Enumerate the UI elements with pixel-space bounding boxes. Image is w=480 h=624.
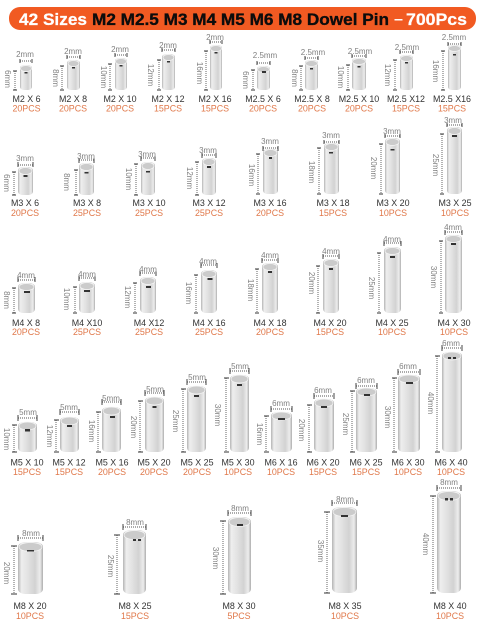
- item: M2 X 8: M2 X 8: [59, 94, 87, 104]
- item: M4 X 10: [62, 270, 102, 337]
- item: M4 X 18: M4 X 18: [253, 318, 287, 328]
- item: M5 X 10: 10mm: [2, 428, 11, 450]
- item: M8 X 40: [421, 478, 467, 621]
- item: M3 X 6: 6mm: [2, 174, 11, 192]
- item: M4 X 16: [184, 257, 226, 337]
- item: M3 X 25: [431, 116, 472, 218]
- item: M3 X 20: 10PCS: [379, 208, 407, 218]
- item: M3 X 8: 25PCS: [73, 208, 101, 218]
- item: M2 X 16: [195, 33, 232, 114]
- item: M3 X 16: 20PCS: [256, 208, 284, 218]
- item: M2 X 8: [51, 47, 87, 114]
- item: M3 X 18: 15PCS: [319, 208, 347, 218]
- item: M5 X 20: [129, 385, 171, 477]
- item: M3 X 16: M3 X 16: [253, 198, 287, 208]
- item: M4 X 25: 4mm: [383, 235, 401, 244]
- item: M3 X 10: 3mm: [138, 150, 156, 159]
- item: M3 X 12: 3mm: [199, 146, 217, 155]
- item: M4 X 8: [2, 271, 40, 337]
- item: M2.5 X 8: 2.5mm: [301, 48, 326, 57]
- item: M5 X 10: [2, 408, 44, 477]
- item: M4 X 12: 12mm: [123, 286, 132, 308]
- item: M2 X 16: 15PCS: [201, 104, 229, 114]
- item: M3 X 10: 25PCS: [135, 208, 163, 218]
- item: M8 X 20: 20mm: [2, 562, 11, 584]
- item: M2.5 X 8: 20PCS: [298, 104, 326, 114]
- item: M4 X 18: [246, 251, 287, 337]
- item: M8 X 35: M8 X 35: [328, 601, 362, 611]
- item: M5 X 25: 20PCS: [183, 467, 211, 477]
- item: M8 X 35: 8mm: [336, 495, 354, 504]
- item: M4 X 30: 30mm: [429, 266, 438, 288]
- item: M8 X 20: 8mm: [22, 529, 40, 538]
- item: M2 X 16: 16mm: [195, 62, 204, 84]
- item: M6 X 25: 15PCS: [352, 467, 380, 477]
- item: M4 X 16: 25PCS: [195, 327, 223, 337]
- item: M2.5 X 6: [241, 51, 281, 114]
- item: M8 X 35: [316, 495, 362, 621]
- item: M6 X 25: 25mm: [341, 413, 350, 435]
- item: M5 X 30: [213, 362, 255, 477]
- item: M8 X 20: 10PCS: [16, 611, 44, 621]
- item: M6 X 25: 6mm: [357, 376, 375, 385]
- item: M8 X 30: 8mm: [231, 504, 249, 513]
- item: M8 X 30: M8 X 30: [222, 601, 256, 611]
- item: M4 X 30: [429, 223, 471, 337]
- item: M5 X 25: M5 X 25: [180, 458, 214, 468]
- item: M4 X 10: 4mm: [78, 270, 96, 279]
- item: M2.5 X 10: 20PCS: [345, 104, 373, 114]
- item: M5 X 30: 10PCS: [224, 467, 252, 477]
- item: M4 X 30: M4 X 30: [437, 318, 471, 328]
- item: M2.5 X 16: 16mm: [431, 60, 440, 82]
- item: M2.5 X 16: M2.5 X16: [433, 94, 471, 104]
- item: M4 X 20: M4 X 20: [313, 318, 347, 328]
- item: M3 X 12: [185, 146, 226, 218]
- title banner: M2 M2.5 M3 M4 M5 M6 M8 Dowel Pin: [92, 10, 389, 29]
- item: M5 X 16: [87, 394, 129, 477]
- item: M4 X 16: 16mm: [184, 282, 193, 304]
- item: M4 X 12: 25PCS: [135, 327, 163, 337]
- item: M2.5 X 12: 2.5mm: [395, 43, 420, 52]
- item: M2 X 10: 2mm: [111, 45, 129, 54]
- item: M3 X 20: 20mm: [369, 157, 378, 179]
- item: M3 X 8: M3 X 8: [73, 198, 101, 208]
- item: M3 X 18: [307, 131, 350, 218]
- item: M8 X 35: 35mm: [316, 540, 325, 562]
- item: M8 X 35: 10PCS: [331, 611, 359, 621]
- item: M2 X 10: [99, 45, 137, 114]
- item: M2.5 X 6: 2.5mm: [253, 51, 278, 60]
- item: M3 X 25: 25mm: [431, 154, 440, 176]
- title banner: [9, 7, 476, 30]
- item: M3 X 12: M3 X 12: [192, 198, 226, 208]
- item: M5 X 30: 5mm: [231, 362, 249, 371]
- item: M3 X 6: 20PCS: [11, 208, 39, 218]
- item: M6 X 30: 6mm: [399, 362, 417, 371]
- item: M8 X 30: [211, 504, 256, 621]
- item: M4 X 20: 20mm: [307, 272, 316, 294]
- item: M3 X 25: 10PCS: [441, 208, 469, 218]
- item: M2 X 12: [146, 41, 185, 114]
- item: M4 X 25: 25mm: [367, 277, 376, 299]
- item: M6 X 16: 10PCS: [267, 467, 295, 477]
- item: M5 X 30: 30mm: [213, 404, 222, 426]
- item: M6 X 20: [297, 386, 340, 477]
- item: M2 X 10: 20PCS: [106, 104, 134, 114]
- item: M2 X 12: 12mm: [146, 64, 155, 86]
- item: M5 X 20: M5 X 20: [137, 458, 171, 468]
- item: M6 X 40: 40mm: [426, 392, 435, 414]
- item: M5 X 10: M5 X 10: [10, 458, 44, 468]
- item: M4 X 12: 4mm: [139, 265, 157, 274]
- item: M2.5 X 8: 8mm: [290, 69, 299, 87]
- item: M3 X 10: [124, 150, 166, 218]
- item: M4 X 8: 8mm: [2, 291, 11, 309]
- item: M3 X 25: M3 X 25: [438, 198, 472, 208]
- item: M3 X 18: 3mm: [322, 131, 340, 140]
- item: M3 X 16: 3mm: [261, 137, 279, 146]
- item: M4 X 12: [123, 265, 164, 337]
- item: M3 X 18: M3 X 18: [316, 198, 350, 208]
- item: M2.5 X 16: [431, 33, 471, 114]
- item: M3 X 20: M3 X 20: [376, 198, 410, 208]
- item: M4 X 10: M4 X10: [72, 318, 102, 328]
- item: M5 X 20: 20PCS: [140, 467, 168, 477]
- item: M5 X 16: M5 X 16: [95, 458, 129, 468]
- item: M2.5 X 8: M2.5 X 8: [294, 94, 330, 104]
- item: M6 X 30: 30mm: [383, 406, 392, 428]
- item: M3 X 6: M3 X 6: [11, 198, 39, 208]
- item: M3 X 12: 12mm: [185, 167, 194, 189]
- item: M3 X 10: 10mm: [124, 168, 133, 190]
- item: M3 X 10: M3 X 10: [132, 198, 166, 208]
- item: M3 X 6: [2, 154, 39, 218]
- item: M3 X 20: [369, 127, 410, 218]
- item: M6 X 20: M6 X 20: [306, 458, 340, 468]
- item: M3 X 16: [247, 137, 287, 218]
- item: M6 X 16: 6mm: [272, 399, 290, 408]
- item: M2.5 X 12: 12mm: [383, 64, 392, 86]
- item: M2 X 8: 8mm: [51, 69, 60, 87]
- item: M4 X 12: M4 X12: [134, 318, 164, 328]
- item: M2.5 X 10: [336, 47, 379, 114]
- item: M2 X 6: [3, 50, 41, 114]
- item: M8 X 40: 40mm: [421, 533, 430, 555]
- item: M2 X 10: 10mm: [99, 66, 108, 88]
- item: M4 X 18: 18mm: [246, 279, 255, 301]
- item: M4 X 20: 4mm: [322, 247, 340, 256]
- item: M8 X 40: 8mm: [440, 478, 458, 487]
- item: M2 X 6: M2 X 6: [12, 94, 41, 104]
- item: M6 X 40: 6mm: [442, 339, 460, 348]
- item: M2.5 X 16: 2.5mm: [442, 33, 467, 42]
- item: M2.5 X 16: 15PCS: [438, 104, 466, 114]
- item: M2.5 X 6: 20PCS: [249, 104, 277, 114]
- item: M3 X 8: [62, 152, 101, 218]
- item: M5 X 10: 5mm: [19, 408, 37, 417]
- item: M8 X 25: [106, 518, 152, 621]
- item: M2 X 16: 2mm: [206, 33, 224, 42]
- item: M3 X 6: 3mm: [16, 154, 34, 163]
- item: M5 X 25: 25mm: [171, 410, 180, 432]
- item: M4 X 30: 4mm: [444, 223, 462, 232]
- item: M2 X 12: M2 X 12: [151, 94, 185, 104]
- item: M6 X 20: 15PCS: [309, 467, 337, 477]
- item: M2 X 12: 15PCS: [154, 104, 182, 114]
- item: M8 X 30: 5PCS: [227, 611, 251, 621]
- item: M4 X 30: 10PCS: [440, 327, 468, 337]
- item: M3 X 8: 3mm: [77, 152, 95, 161]
- item: M8 X 20: [2, 529, 47, 621]
- item: M5 X 16: 5mm: [102, 394, 120, 403]
- item: M4 X 25: [367, 235, 409, 337]
- item: M4 X 25: M4 X 25: [375, 318, 409, 328]
- item: M5 X 12: [45, 403, 86, 477]
- item: M8 X 40: 10PCS: [436, 611, 464, 621]
- item: M6 X 16: M6 X 16: [264, 458, 298, 468]
- item: M3 X 20: 3mm: [383, 127, 401, 136]
- item: M3 X 8: 8mm: [62, 173, 71, 191]
- item: M2.5 X 6: 6mm: [241, 71, 250, 89]
- item: M2 X 8: 20PCS: [59, 104, 87, 114]
- item: M6 X 40: [426, 339, 468, 477]
- item: M8 X 25: 15PCS: [121, 611, 149, 621]
- item: M5 X 12: M5 X 12: [52, 458, 86, 468]
- item: M6 X 16: [255, 399, 298, 477]
- item: M8 X 25: M8 X 25: [118, 601, 152, 611]
- item: M2 X 6: 2mm: [16, 50, 34, 59]
- item: M8 X 20: M8 X 20: [13, 601, 47, 611]
- item: M6 X 20: 20mm: [297, 419, 306, 441]
- item: M2.5 X 12: [383, 43, 425, 114]
- item: M2 X 16: M2 X 16: [198, 94, 232, 104]
- item: M5 X 16: 16mm: [87, 420, 96, 442]
- item: M2.5 X 12: 15PCS: [392, 104, 420, 114]
- item: M4 X 8: 4mm: [17, 271, 35, 280]
- item: M2.5 X 8: [290, 48, 330, 114]
- item: M4 X 20: [307, 247, 347, 337]
- item: M4 X 25: 10PCS: [378, 327, 406, 337]
- item: M2.5 X 10: M2.5 X 10: [339, 94, 379, 104]
- item: M3 X 25: 3mm: [444, 116, 462, 125]
- item: M5 X 10: 15PCS: [13, 467, 41, 477]
- item: M2.5 X 10: 2.5mm: [348, 47, 373, 56]
- item: M6 X 40: 10PCS: [437, 467, 465, 477]
- item: M5 X 30: M5 X 30: [221, 458, 255, 468]
- item: M5 X 20: 5mm: [146, 385, 164, 394]
- item: M2.5 X 6: M2.5 X 6: [245, 94, 281, 104]
- item: M3 X 18: 18mm: [307, 161, 316, 183]
- item: M6 X 30: M6 X 30: [391, 458, 425, 468]
- item: M4 X 8: M4 X 8: [12, 318, 40, 328]
- item: M2 X 8: 2mm: [64, 47, 82, 56]
- item: M2 X 6: 6mm: [3, 70, 12, 88]
- item: M4 X 10: 10mm: [62, 288, 71, 310]
- item: M2 X 6: 20PCS: [12, 104, 41, 114]
- item: M5 X 12: 15PCS: [55, 467, 83, 477]
- item: M2.5 X 10: 10mm: [336, 66, 345, 88]
- item: M2 X 10: M2 X 10: [103, 94, 137, 104]
- item: M4 X 8: 20PCS: [12, 327, 40, 337]
- item: M4 X 20: 15PCS: [316, 327, 344, 337]
- item: M8 X 25: 8mm: [126, 518, 144, 527]
- item: M4 X 16: M4 X 16: [192, 318, 226, 328]
- item: M5 X 25: [171, 373, 214, 477]
- item: M5 X 20: 20mm: [129, 416, 138, 438]
- item: M8 X 40: M8 X 40: [433, 601, 467, 611]
- title banner: 42 Sizes: [19, 10, 87, 29]
- item: M8 X 30: 30mm: [211, 547, 220, 569]
- item: M3 X 12: 25PCS: [195, 208, 223, 218]
- item: M2 X 12: 2mm: [159, 41, 177, 50]
- item: M5 X 12: 12mm: [45, 425, 54, 447]
- item: M6 X 40: M6 X 40: [434, 458, 468, 468]
- item: M3 X 16: 16mm: [247, 164, 256, 186]
- item: M2.5 X 12: M2.5 X12: [387, 94, 425, 104]
- item: M4 X 16: 4mm: [199, 257, 217, 266]
- title banner: 700Pcs: [406, 10, 467, 29]
- item: M6 X 20: 6mm: [314, 386, 332, 395]
- item: M8 X 25: 25mm: [106, 555, 115, 577]
- item: M4 X 18: 20PCS: [256, 327, 284, 337]
- item: M4 X 10: 25PCS: [73, 327, 101, 337]
- item: M6 X 30: [383, 362, 425, 477]
- item: M5 X 16: 20PCS: [98, 467, 126, 477]
- item: M4 X 18: 4mm: [261, 251, 279, 260]
- item: M6 X 25: [341, 376, 383, 477]
- item: M6 X 25: M6 X 25: [349, 458, 383, 468]
- item: M5 X 12: 5mm: [60, 403, 78, 412]
- item: M6 X 30: 10PCS: [394, 467, 422, 477]
- item: M5 X 25: 5mm: [188, 373, 206, 382]
- item: M6 X 16: 16mm: [255, 423, 264, 445]
- title banner: –: [394, 11, 403, 28]
